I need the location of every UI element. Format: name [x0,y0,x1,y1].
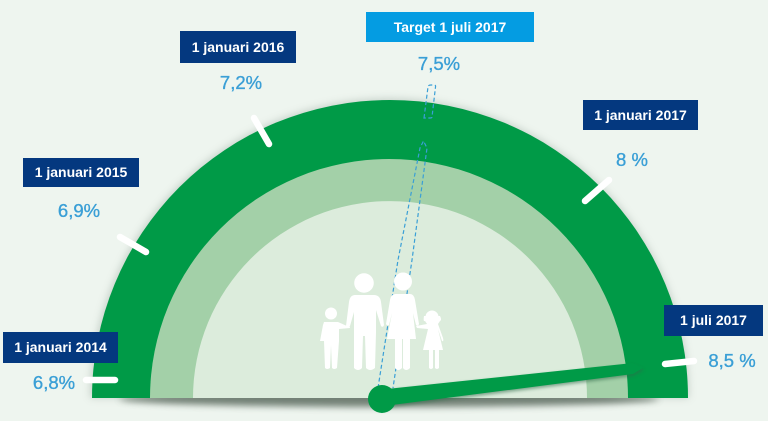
outer green gauge band [92,100,688,398]
label: 1 januari 2014: 1 januari 2014 [14,339,107,355]
value 6,9%: 6,9% [58,200,100,221]
label: 1 januari 2015 [23,158,139,221]
mother [386,272,419,370]
tick 2016 [254,118,269,144]
label: Target 1 juli 2017 [366,12,534,74]
tick 2015 [120,237,146,252]
inner pale semicircle [193,201,587,398]
actual value needle [368,363,644,413]
value 6,8%: 6,8% [33,372,75,393]
label: Target 1 juli 2017: Target 1 juli 2017 [394,19,506,35]
target needle, dashed outline [378,85,436,388]
needle shadow [382,365,644,408]
label: 1 januari 2016: 1 januari 2016 [192,39,285,55]
family icon [320,272,443,370]
tick juli 2017 [665,361,694,364]
floor shadow under the gauge [119,391,659,407]
label: 1 januari 2016 [180,31,296,93]
label: 1 januari 2015: 1 januari 2015 [35,164,128,180]
lower needle part [378,141,427,388]
boy [320,308,350,369]
label: 1 januari 2014 [3,332,118,393]
tick marks [86,118,694,380]
father [346,273,384,370]
needle shaft [382,363,643,406]
upper needle part [424,85,436,118]
value 8 %: 8 % [616,149,648,170]
tick 2017 [585,180,609,201]
label: 1 juli 2017: 1 juli 2017 [680,312,747,328]
gauge shadow [90,98,689,398]
needle hub [368,385,396,413]
tick 2014 [86,377,115,383]
label: 1 juli 2017 [664,305,763,371]
value 8,5 %: 8,5 % [708,350,756,371]
middle light green band [150,159,628,398]
girl [416,310,443,369]
value 7,2%: 7,2% [220,72,262,93]
label: 1 januari 2017: 1 januari 2017 [594,107,687,123]
label: 1 januari 2017 [583,100,698,170]
value 7,5%: 7,5% [418,53,460,74]
